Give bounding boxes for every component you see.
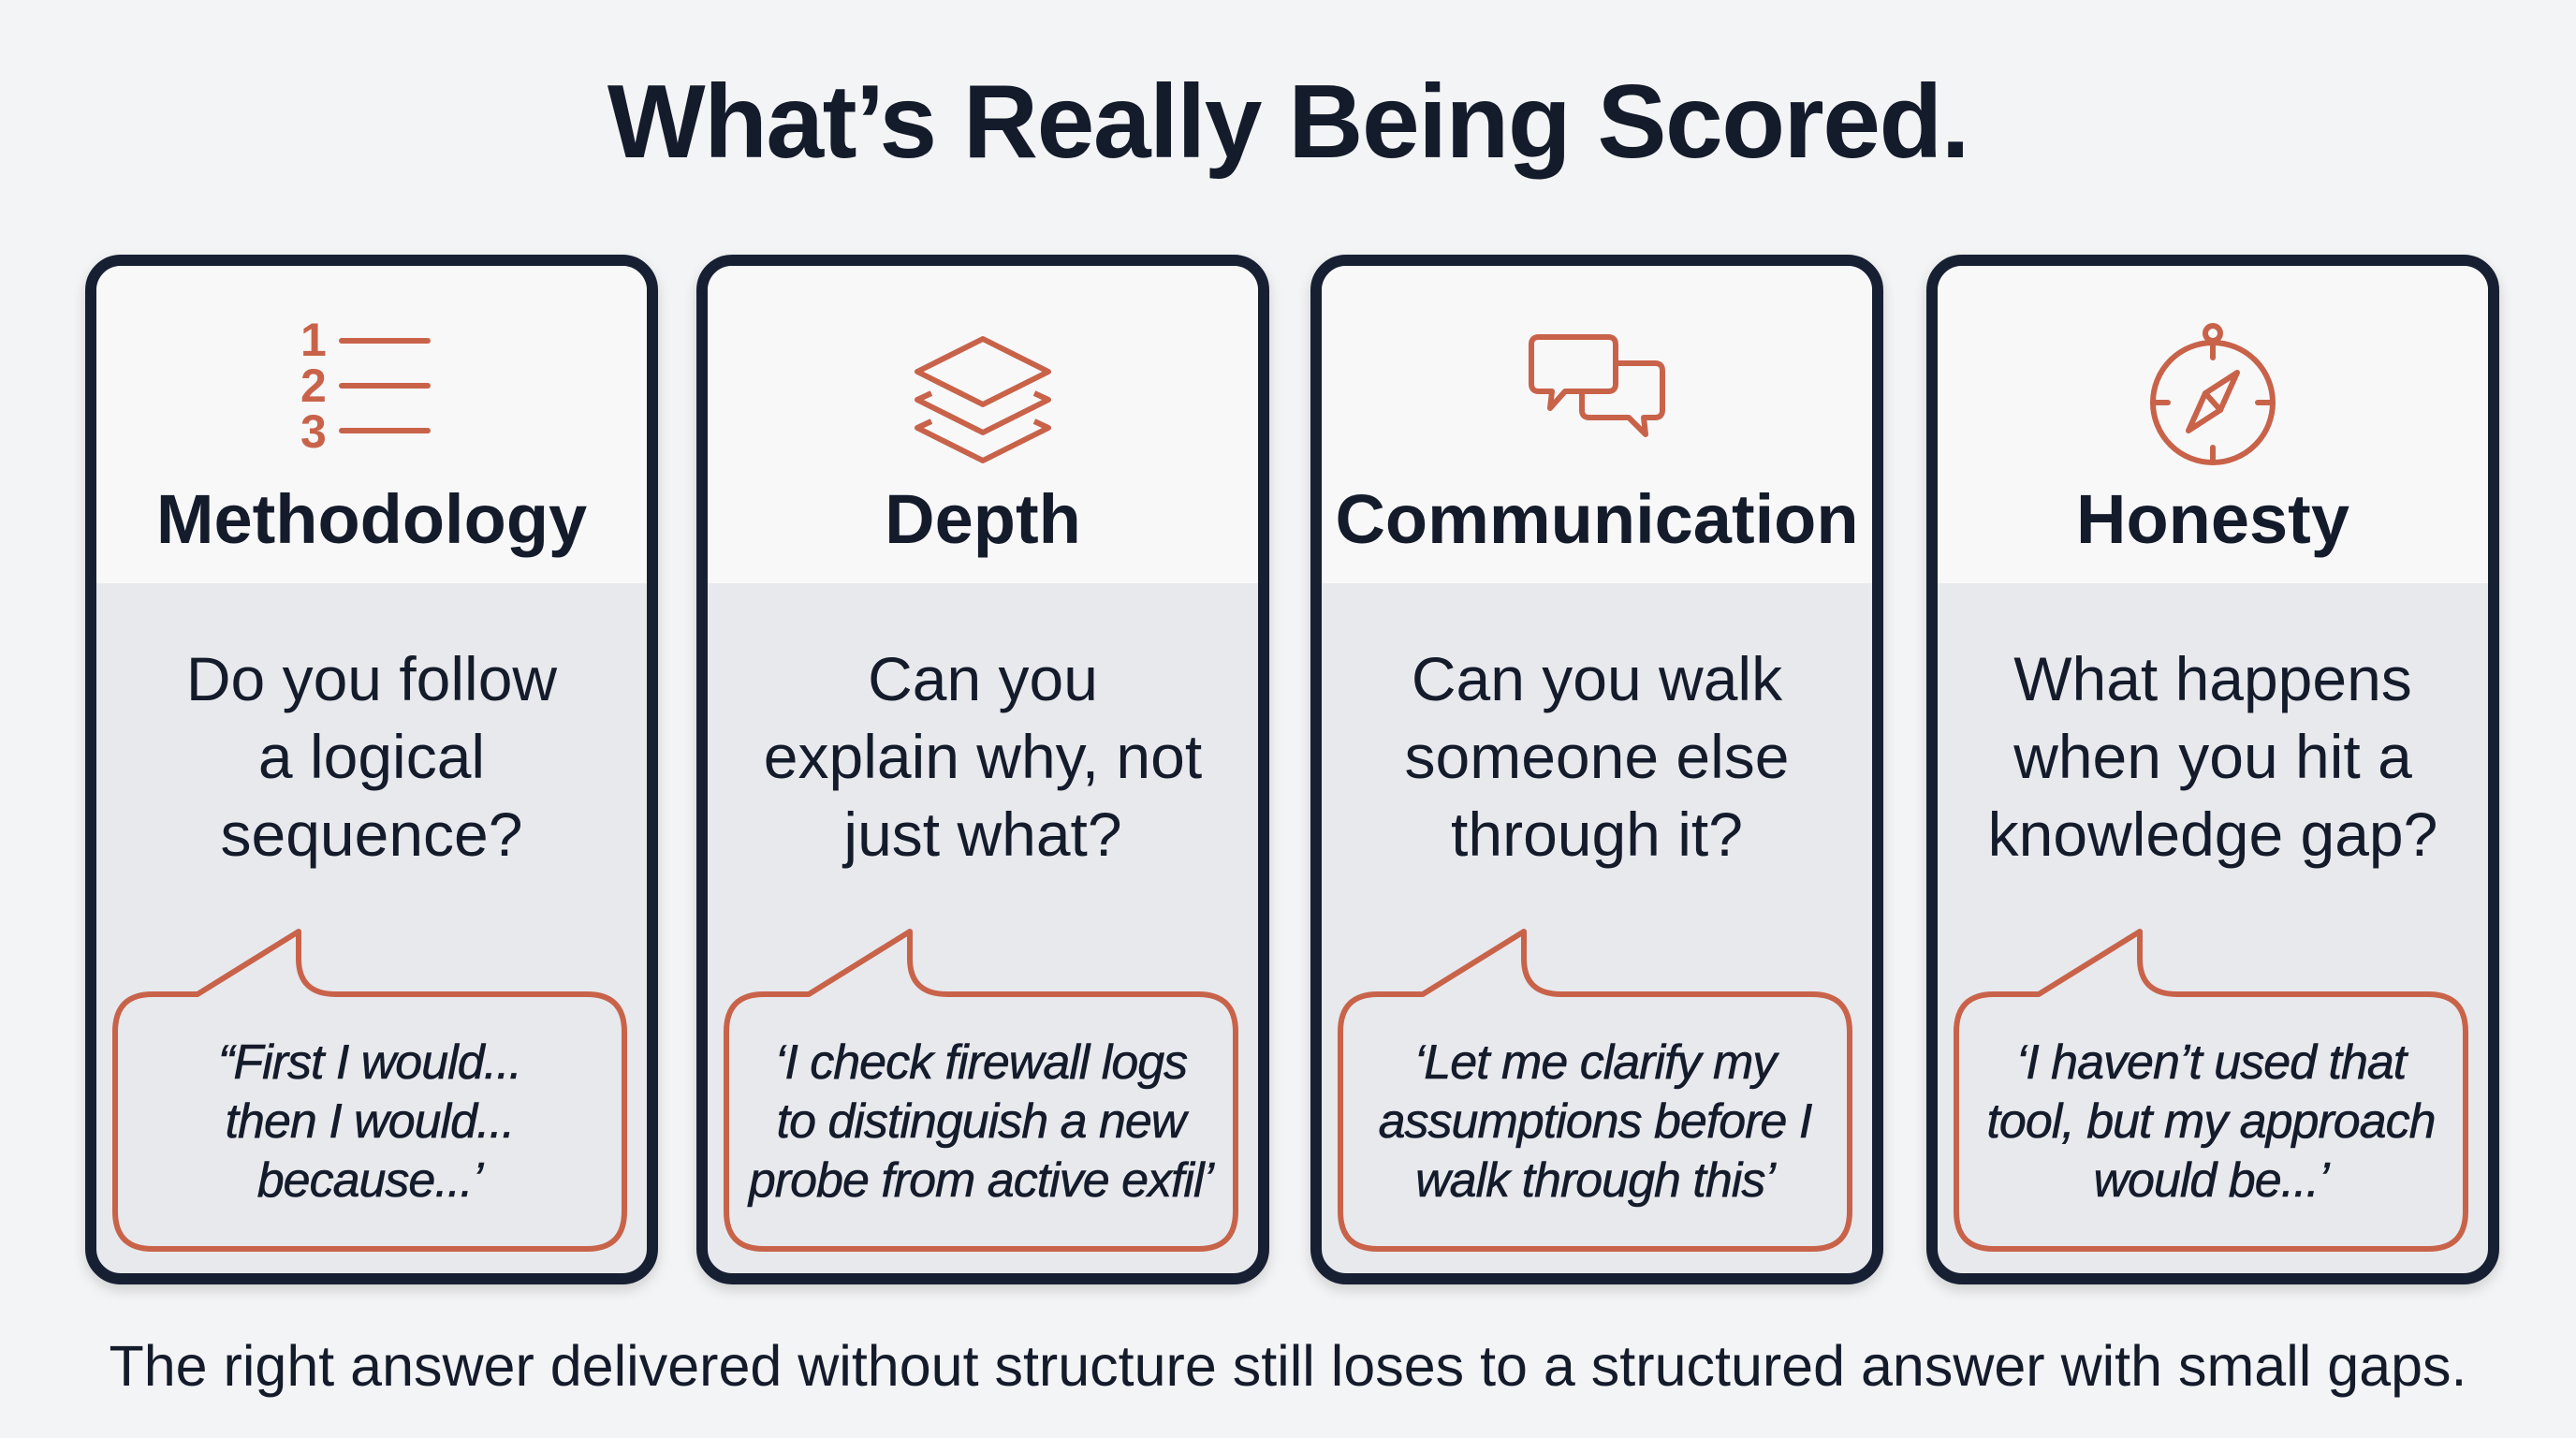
quote: ‘I haven’t used that [2016, 1035, 2406, 1090]
question [764, 644, 1202, 869]
icon: numbered list: 1 [300, 314, 327, 366]
quote: because...’ [257, 1153, 482, 1208]
panel: honesty [1922, 255, 2504, 1295]
speech bubble [1954, 929, 2468, 1252]
quote: would be...’ [2093, 1153, 2329, 1208]
quote: ‘Let me clarify my [1414, 1035, 1776, 1090]
quote [747, 1035, 1215, 1208]
quote: to distinguish a new [777, 1094, 1185, 1149]
speech bubble [112, 929, 627, 1252]
title: What’s Really Being Scored. [607, 64, 1969, 180]
speech bubble [1338, 929, 1852, 1252]
icon: chat bubbles [1529, 334, 1665, 437]
heading: Honesty [2076, 480, 2349, 558]
icon: compass [2150, 323, 2276, 465]
question [1405, 644, 1789, 869]
question: What happens [2013, 644, 2412, 713]
quote: tool, but my approach [1986, 1094, 2436, 1149]
question: Can you walk [1412, 644, 1782, 713]
icon: numbered list: 3 [300, 405, 327, 458]
question: through it? [1451, 800, 1743, 869]
question: when you hit a [2013, 722, 2412, 791]
icon: numbered list [300, 314, 431, 458]
quote: probe from active exfil’ [749, 1153, 1213, 1208]
heading: Methodology [156, 480, 587, 558]
question [1988, 644, 2437, 869]
question: Can you [868, 644, 1098, 713]
question: explain why, not [764, 722, 1202, 791]
heading: Depth [885, 480, 1081, 558]
footer text: The right answer delivered without structure still loses to a structured answer with small gaps. [109, 1334, 2467, 1398]
quote [1379, 1035, 1812, 1208]
question: sequence? [221, 800, 522, 869]
panel: communication [1306, 255, 1888, 1295]
question: someone else [1405, 722, 1789, 791]
question [186, 644, 558, 869]
question: just what? [843, 800, 1122, 869]
quote: ‘I check firewall logs [775, 1035, 1187, 1090]
quote: walk through this’ [1415, 1153, 1775, 1208]
speech bubble [724, 929, 1238, 1252]
question: knowledge gap? [1988, 800, 2437, 869]
quote: “First I would... [218, 1035, 521, 1090]
panel: methodology [80, 255, 663, 1295]
heading: Communication [1335, 480, 1859, 558]
icon: numbered list: 2 [300, 360, 327, 412]
panel: depth [692, 255, 1274, 1295]
question: Do you follow [186, 644, 557, 713]
quote: then I would... [226, 1094, 514, 1149]
quote [218, 1035, 521, 1208]
quote: assumptions before I [1379, 1094, 1811, 1149]
quote [1986, 1035, 2436, 1208]
icon: layers [915, 336, 1051, 463]
question: a logical [258, 722, 485, 791]
